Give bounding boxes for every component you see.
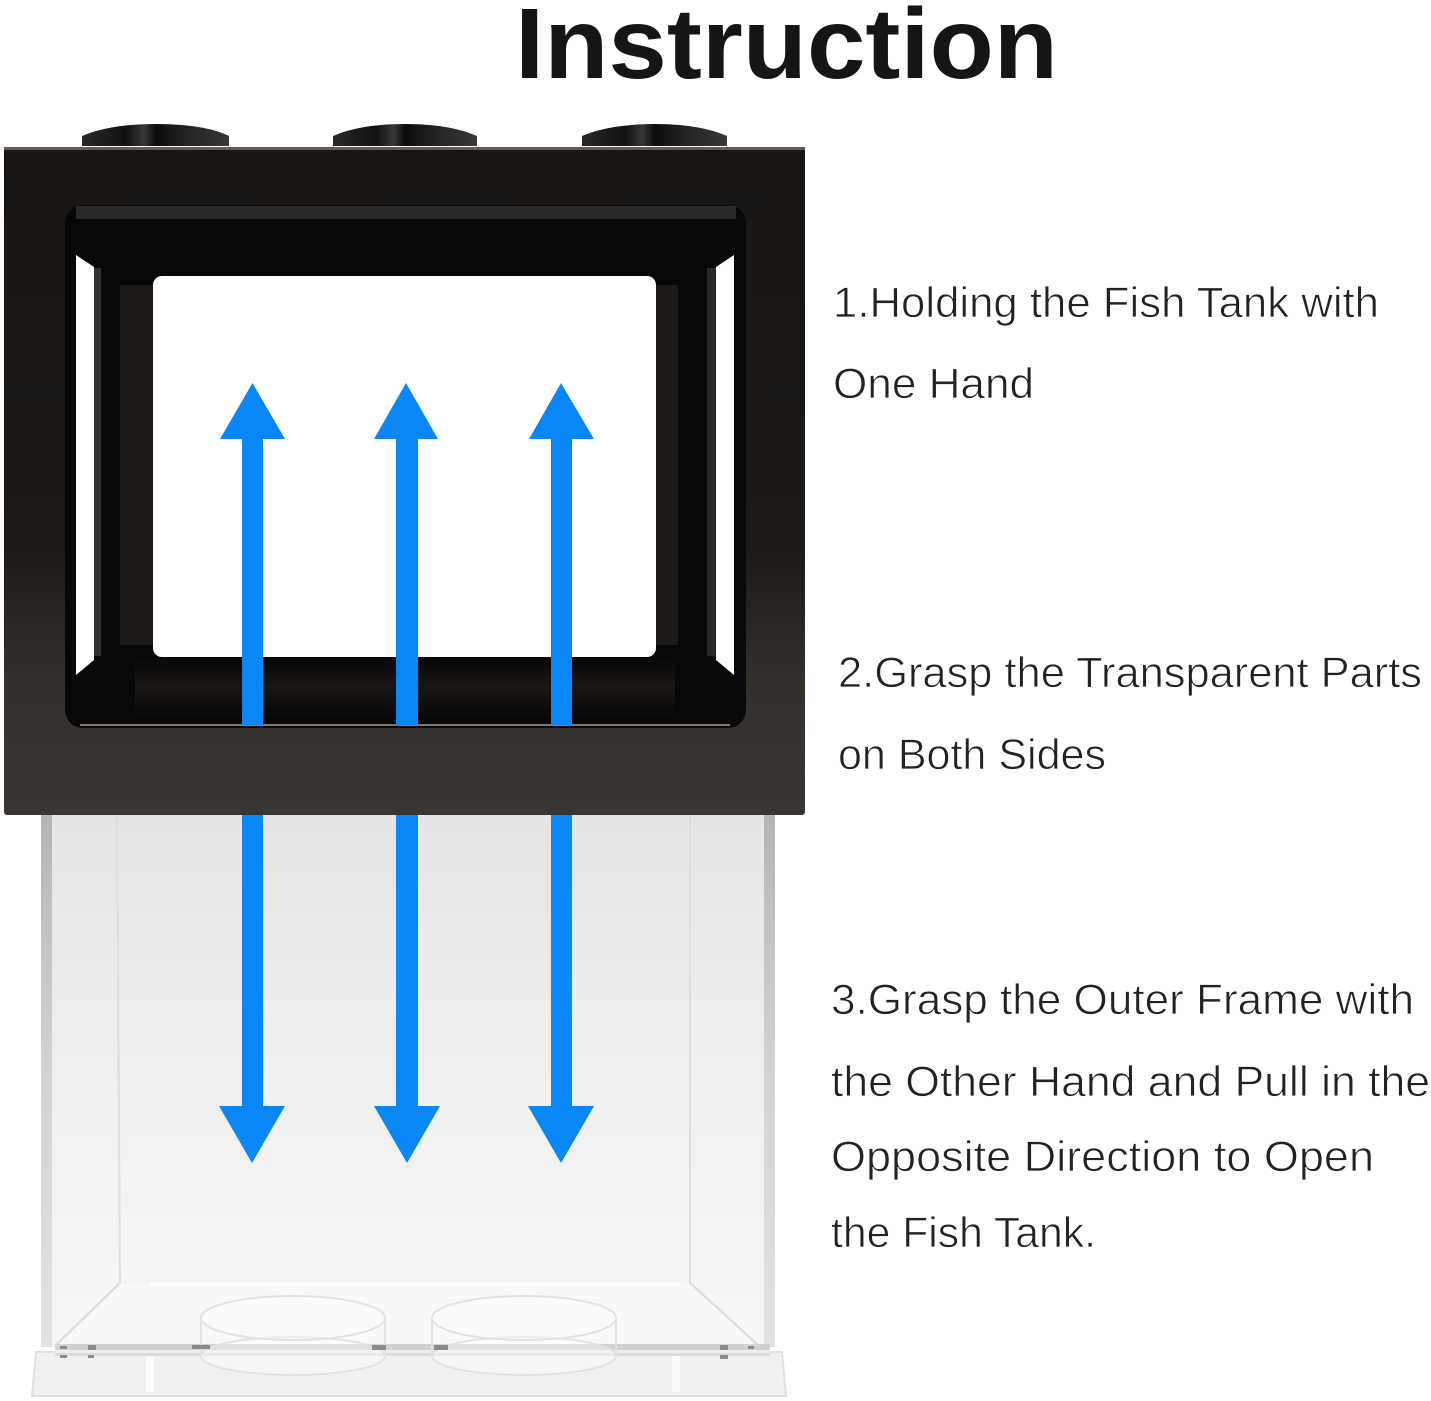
step 3 text: the Other Hand and Pull in the [831, 1058, 1430, 1106]
tank base [32, 1344, 786, 1396]
top studs [82, 124, 727, 146]
step 3 text: the Fish Tank. [831, 1209, 1096, 1257]
step 3 text [831, 976, 1430, 1257]
step 3 text: 3.Grasp the Outer Frame with [831, 976, 1414, 1024]
step 3 text: Opposite Direction to Open [831, 1133, 1374, 1181]
feeding cups [201, 1296, 616, 1375]
arrow: left [219, 383, 285, 1163]
step 1 text: One Hand [833, 360, 1034, 408]
step 1 text: 1.Holding the Fish Tank with [833, 279, 1379, 327]
step 1 text [833, 279, 1379, 408]
step 2 text: 2.Grasp the Transparent Parts [838, 649, 1422, 697]
black frame [4, 147, 805, 815]
arrow: middle [374, 383, 440, 1163]
transparent tank body [41, 812, 775, 1347]
step 2 text: on Both Sides [838, 731, 1106, 779]
fish tank illustration [4, 124, 805, 1396]
step 2 text [838, 649, 1422, 779]
arrow: right [528, 383, 594, 1163]
rail marks [60, 1345, 754, 1359]
